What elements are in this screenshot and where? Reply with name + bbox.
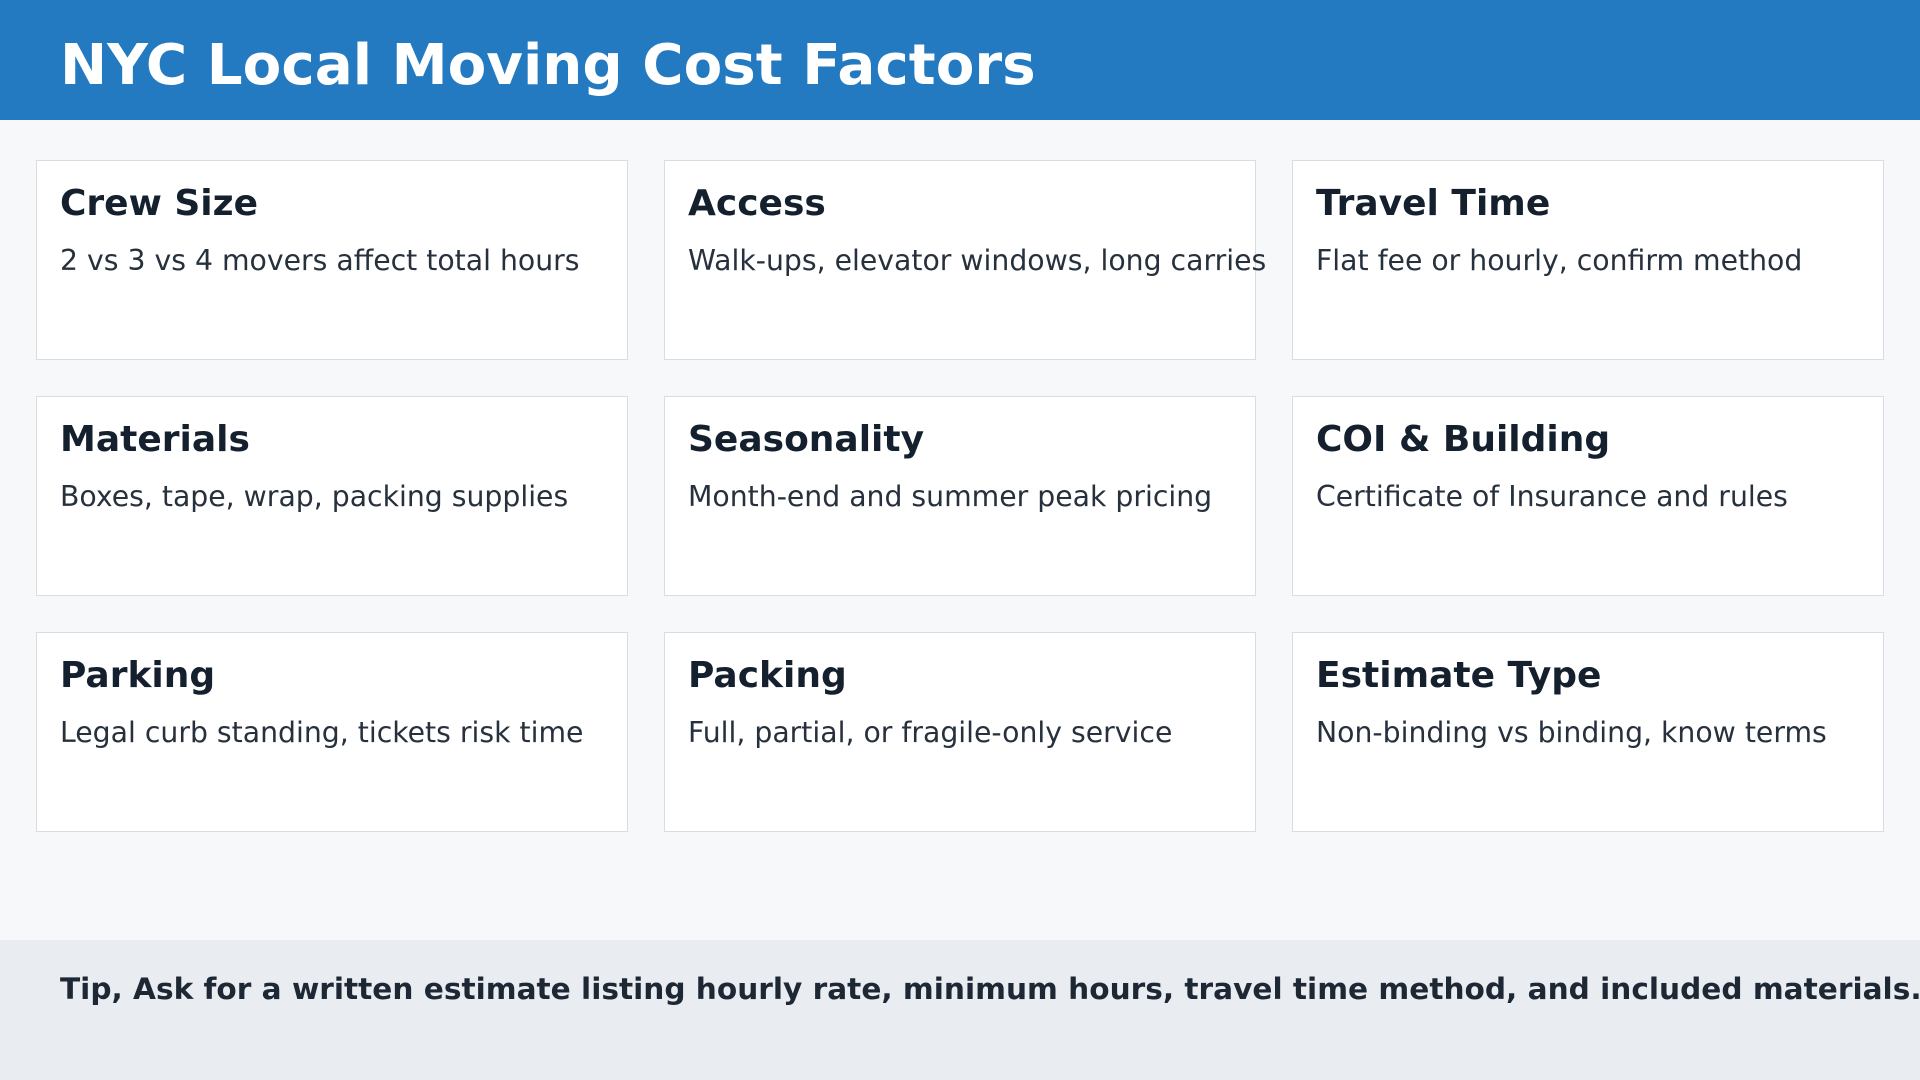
card: parking bbox=[36, 632, 628, 832]
footer tip: Tip, Ask for a written estimate listing hourly rate, minimum hours, travel time method, and included materials. bbox=[60, 972, 1920, 1006]
card: seasonality: Month-end and summer peak pricing bbox=[688, 480, 1212, 513]
card: estimate type: Non-binding vs binding, know terms bbox=[1316, 716, 1827, 749]
footer tip bbox=[0, 940, 1920, 1080]
card: travel time: Travel Time bbox=[1316, 183, 1550, 224]
header bbox=[0, 0, 1920, 120]
card: materials: Materials bbox=[60, 419, 250, 460]
card: seasonality bbox=[664, 396, 1256, 596]
card: packing: Full, partial, or fragile-only service bbox=[688, 716, 1172, 749]
card: parking: Legal curb standing, tickets risk time bbox=[60, 716, 583, 749]
card: estimate type: Estimate Type bbox=[1316, 655, 1601, 696]
card: parking: Parking bbox=[60, 655, 215, 696]
card: access: Access bbox=[688, 183, 826, 224]
card: access: Walk-ups, elevator windows, long carries bbox=[688, 244, 1266, 277]
card: materials bbox=[36, 396, 628, 596]
card: access bbox=[664, 160, 1256, 360]
card: estimate type bbox=[1292, 632, 1884, 832]
title: NYC Local Moving Cost Factors bbox=[60, 33, 1036, 98]
card: crew size bbox=[36, 160, 628, 360]
card: packing: Packing bbox=[688, 655, 847, 696]
card: seasonality: Seasonality bbox=[688, 419, 924, 460]
card: travel time: Flat fee or hourly, confirm method bbox=[1316, 244, 1802, 277]
card: coi & building: COI & Building bbox=[1316, 419, 1610, 460]
card: crew size: 2 vs 3 vs 4 movers affect total hours bbox=[60, 244, 580, 277]
card: coi & building: Certificate of Insurance and rules bbox=[1316, 480, 1788, 513]
card: coi & building bbox=[1292, 396, 1884, 596]
card: materials: Boxes, tape, wrap, packing supplies bbox=[60, 480, 568, 513]
card: travel time bbox=[1292, 160, 1884, 360]
card: packing bbox=[664, 632, 1256, 832]
card: crew size: Crew Size bbox=[60, 183, 258, 224]
